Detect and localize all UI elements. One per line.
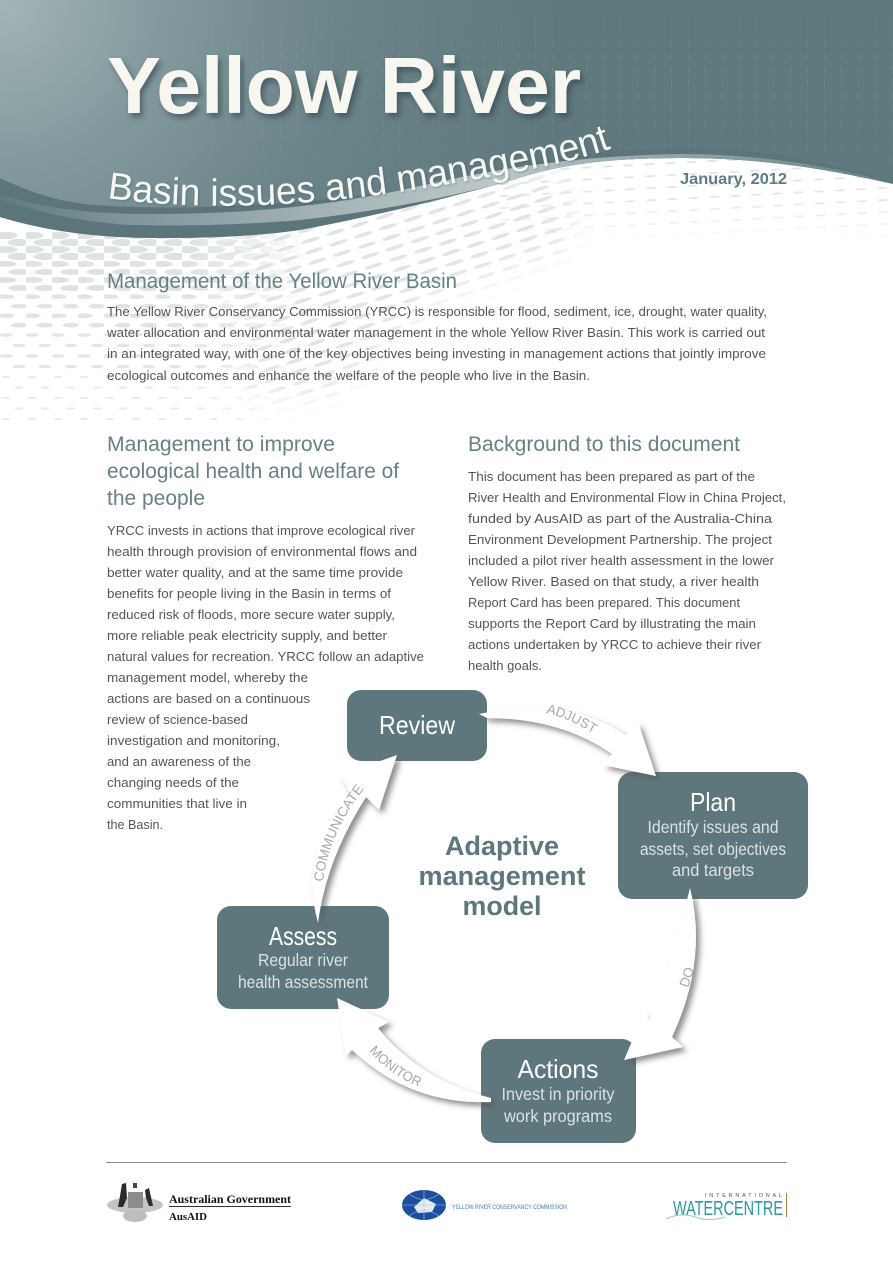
box: review: Review bbox=[379, 710, 455, 740]
body text: ecological health: management model, whereby the bbox=[107, 670, 308, 685]
arrow: do: DO bbox=[677, 965, 697, 989]
diagram title: Adaptive bbox=[445, 831, 559, 861]
body text: ecological health: actions are based on a continuous bbox=[107, 691, 311, 706]
arrow: adjust bbox=[479, 704, 662, 780]
heading: ecological health: the people bbox=[107, 487, 205, 510]
logo: australian government bbox=[107, 1183, 291, 1223]
body text: ecological health: health through provision of environmental flows and bbox=[107, 544, 417, 559]
box: assess: health assessment bbox=[238, 972, 368, 992]
body text: ecological health: more reliable peak electricity supply, and better bbox=[107, 628, 388, 643]
heading: ecological health: Management to improve bbox=[107, 433, 335, 456]
body text: background: River Health and Environmental Flow in China Project, bbox=[468, 490, 786, 505]
body text: ecological health: natural values for recreation. YRCC follow an adaptive bbox=[107, 649, 424, 664]
box: actions: Actions bbox=[518, 1054, 598, 1084]
icon: coat of arms bbox=[107, 1183, 163, 1222]
body text: ecological health: changing needs of the bbox=[107, 775, 239, 790]
header banner bbox=[0, 0, 893, 238]
arrow: communicate: COMMUNICATE bbox=[314, 784, 364, 881]
box: assess: Assess bbox=[269, 921, 337, 951]
logo: international watercentre bbox=[666, 1193, 787, 1220]
background dot pattern bbox=[0, 150, 893, 422]
footer bbox=[106, 1162, 787, 1223]
body text: ecological health: benefits for people living in the Basin in terms of bbox=[107, 586, 391, 601]
body text: background: health goals. bbox=[468, 658, 542, 673]
body text: background: actions undertaken by YRCC to achieve their river bbox=[468, 637, 762, 652]
body text: ecological health: and an awareness of the bbox=[107, 754, 251, 769]
body text: ecological health: better water quality, and at the same time provide bbox=[107, 565, 403, 580]
adaptive management diagram bbox=[217, 690, 808, 1143]
box: plan: and targets bbox=[672, 860, 754, 880]
body text: background: This document has been prepared as part of the bbox=[468, 469, 755, 484]
body text: ecological health: reduced risk of floods, more secure water supply, bbox=[107, 607, 395, 622]
box: review bbox=[347, 690, 487, 761]
box: plan bbox=[618, 772, 808, 899]
box: actions bbox=[481, 1039, 636, 1143]
body text: background: funded by AusAID as part of the Australia-China bbox=[468, 511, 773, 526]
logo: australian government: AusAID bbox=[169, 1212, 207, 1223]
heading: ecological health bbox=[107, 433, 399, 510]
logo: yellow river conservancy commission bbox=[402, 1190, 567, 1220]
intro text: The Yellow River Conservancy Commission (YRCC) is responsible for flood, sediment, ice, drought, water quality, bbox=[107, 304, 767, 319]
intro text: ecological outcomes and enhance the welfare of the people who live in the Basin. bbox=[107, 368, 590, 383]
box: actions: work programs bbox=[503, 1106, 612, 1126]
title: Yellow River bbox=[107, 41, 581, 130]
arrow: monitor bbox=[337, 998, 494, 1110]
logo: yellow river conservancy commission: YELLOW RIVER CONSERVANCY COMMISSION bbox=[452, 1204, 567, 1211]
icon: globe bbox=[402, 1190, 446, 1220]
section: management of the basin bbox=[106, 270, 767, 383]
wave band bbox=[0, 148, 893, 238]
box: assess: Regular river bbox=[258, 950, 348, 970]
body text: background bbox=[468, 469, 786, 673]
heading: background: Background to this document bbox=[468, 433, 740, 456]
box: plan: assets, set objectives bbox=[640, 839, 786, 859]
body text: background: Environment Development Partnership. The project bbox=[468, 532, 772, 547]
logo: international watercentre: WATERCENTRE bbox=[673, 1198, 783, 1220]
box: actions: Invest in priority bbox=[502, 1084, 615, 1104]
body text: ecological health: the Basin. bbox=[107, 817, 163, 832]
diagram title: model bbox=[462, 891, 542, 921]
arrow: communicate bbox=[313, 755, 404, 923]
date: January, 2012 bbox=[680, 171, 787, 188]
body text: background: Yellow River. Based on that study, a river health bbox=[468, 574, 759, 589]
logo: australian government: Australian Government bbox=[169, 1192, 291, 1206]
logo: international watercentre: INTERNATIONAL bbox=[705, 1193, 782, 1199]
body text: background: included a pilot river health assessment in the lower bbox=[468, 553, 775, 568]
body text: ecological health: investigation and monitoring, bbox=[107, 733, 280, 748]
section: ecological health and welfare bbox=[107, 433, 424, 832]
heading: ecological health: ecological health and welfare of bbox=[107, 460, 399, 483]
intro text: in an integrated way, with one of the key objectives being investing in management actions that jointly improve bbox=[107, 346, 766, 361]
section: background to this document bbox=[468, 433, 786, 673]
body text: background: Report Card has been prepared. This document bbox=[468, 595, 740, 610]
body text: ecological health: communities that live in bbox=[107, 796, 247, 811]
arrow: adjust: ADJUST bbox=[546, 704, 598, 732]
box: plan: Plan bbox=[690, 787, 736, 817]
subtitle: Basin issues and management bbox=[110, 126, 612, 207]
arrow: do bbox=[624, 888, 697, 1060]
diagram title: management bbox=[418, 861, 586, 891]
box: assess bbox=[217, 906, 389, 1009]
body text: ecological health: review of science-based bbox=[107, 712, 248, 727]
body text: background: supports the Report Card by illustrating the main bbox=[468, 616, 756, 631]
arrow: monitor: MONITOR bbox=[370, 1046, 421, 1086]
intro text: water allocation and environmental water management in the whole Yellow River Basin. This work is carried out bbox=[106, 325, 765, 340]
body text: ecological health bbox=[107, 523, 424, 832]
heading: management of the basin: Management of the Yellow River Basin bbox=[107, 270, 457, 293]
box: plan: Identify issues and bbox=[648, 817, 778, 837]
body text: ecological health: YRCC invests in actions that improve ecological river bbox=[107, 523, 416, 538]
diagram title bbox=[418, 831, 586, 921]
intro text bbox=[106, 304, 767, 383]
